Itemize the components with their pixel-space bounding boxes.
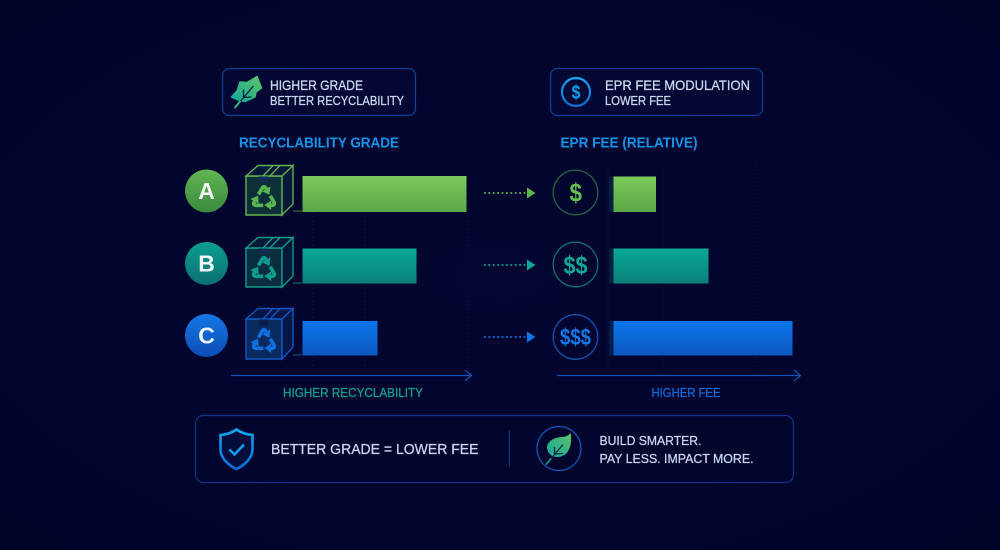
label: higher recyclability: HIGHER RECYCLABILITY <box>283 386 424 400</box>
summary text: build smarter: BUILD SMARTER. <box>600 433 702 448</box>
icon: dollar coin: $ <box>572 82 581 104</box>
heading: recyclability grade: RECYCLABILITY GRADE <box>239 136 399 152</box>
grade B badge <box>185 242 228 285</box>
icon: double dollar fee: $$ <box>564 252 588 280</box>
icon: triple dollar fee <box>553 315 598 359</box>
summary text: build smarter <box>600 433 754 466</box>
summary text: better grade: BETTER GRADE = LOWER FEE <box>271 441 478 458</box>
icon: double dollar fee <box>553 242 598 287</box>
icon: shield check <box>220 430 252 469</box>
arrow: C to fee <box>484 332 536 342</box>
panel: summary <box>196 416 794 482</box>
callout text: HIGHER GRADE <box>270 78 363 93</box>
callout text <box>270 78 405 108</box>
arrow: higher recyclability axis <box>231 370 472 381</box>
callout text: LOWER FEE <box>605 94 671 108</box>
arrow: higher fee axis <box>557 370 800 381</box>
arrow: B to fee <box>484 260 536 270</box>
bar: grade A fee <box>609 176 656 212</box>
bar: grade B fee <box>609 248 708 284</box>
callout text: BETTER RECYCLABILITY <box>270 94 405 108</box>
callout: higher grade <box>222 68 416 116</box>
bar: grade C recyclability <box>302 321 378 356</box>
icon: recycling box C <box>246 308 302 359</box>
icon: dollar coin <box>562 78 590 106</box>
grade C badge: C <box>198 322 215 348</box>
bar: grade B recyclability <box>302 248 416 284</box>
bar: grade C fee <box>609 321 792 356</box>
grade B badge: B <box>198 250 215 276</box>
bar: grade A recyclability <box>302 176 466 212</box>
icon: single dollar fee <box>553 170 598 215</box>
icon: recycling box B <box>246 238 302 287</box>
callout text: EPR FEE MODULATION <box>605 78 750 93</box>
summary text: build smarter: PAY LESS. IMPACT MORE. <box>600 451 754 466</box>
arrow: A to fee <box>484 188 536 198</box>
callout text <box>605 78 750 108</box>
icon: recycling box A <box>246 166 302 215</box>
grade C badge <box>185 314 228 357</box>
grade A badge: A <box>198 178 215 204</box>
icon: leaf <box>232 76 262 108</box>
label: higher fee: HIGHER FEE <box>652 386 720 400</box>
icon: single dollar fee: $ <box>570 178 582 208</box>
heading: EPR fee: EPR FEE (RELATIVE) <box>560 136 698 152</box>
grade A badge <box>185 170 228 212</box>
icon: leaf in ring <box>537 426 581 470</box>
divider <box>509 430 510 467</box>
icon: triple dollar fee: $$$ <box>560 324 591 350</box>
callout: EPR fee modulation <box>550 68 762 116</box>
